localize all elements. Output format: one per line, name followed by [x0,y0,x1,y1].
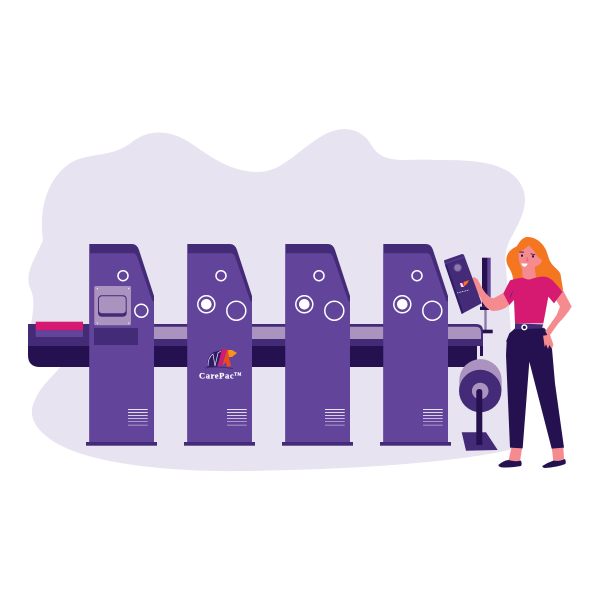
belt light band [154,327,481,339]
conveyor belt [28,324,483,367]
vent [325,409,345,426]
nose [526,257,529,262]
machine unit 1 [86,244,157,446]
upright stand [480,258,493,333]
panel rivets [97,288,129,324]
machine shell [383,244,448,442]
sheet top [36,322,83,330]
ring dial centre [201,299,212,310]
bear orange snout [228,350,237,357]
shoe right [542,459,566,468]
CarePac logo [199,349,242,380]
right dial [135,304,148,317]
machine shell [285,244,350,442]
bear ground line [205,367,233,368]
panel screen shadow [98,295,127,317]
sleeve crease [510,292,513,298]
bar highlight [488,258,491,307]
bear white contour lines [208,351,221,366]
shirt [503,277,563,323]
bear left body [207,350,222,367]
machine base [380,442,451,446]
machine body [89,253,154,442]
machine body [383,253,448,442]
right arm and hand [543,290,572,349]
neck [522,268,536,281]
ring dial [394,296,411,313]
roll back [459,359,502,391]
logo wordmark stripe [457,290,469,293]
pouch back [444,254,482,314]
logo wordmark: CarePac [199,370,234,380]
machine unit 2 [184,244,255,446]
shoe left [498,460,522,467]
machine body [285,253,350,442]
hair [506,237,563,291]
trousers [506,328,564,449]
bear pink stripe [218,349,227,366]
ring dial [296,296,313,313]
machine unit 4 [380,244,451,446]
panel plate [94,286,131,325]
small dial [314,271,324,281]
small dial [216,271,226,281]
pouch left gusset [445,265,464,314]
logo icon: bear stripes [205,349,237,368]
background blob [28,129,525,471]
foot [483,330,493,333]
belt dark lower section [28,346,477,367]
belt buckle [522,325,527,330]
vent [423,409,443,426]
machine shell [89,244,154,442]
large dial [227,301,246,320]
machine base [86,442,157,446]
eyes and brows [519,252,535,257]
stem [484,310,487,330]
machine base [282,442,353,446]
vent [128,409,148,426]
belt top stripe [28,324,483,346]
belt right stub [480,346,483,356]
vent [227,409,247,426]
panel screen [99,296,126,313]
printed pouch held by woman [444,254,482,314]
control panel [94,286,131,325]
roll hub [472,383,489,399]
stand foot [462,432,498,451]
machine shell [187,244,252,442]
pouch top seam [445,257,464,264]
ring dial centre [397,299,408,310]
trousers hip [506,328,547,342]
ankle left [508,447,522,461]
pink sheet on belt [36,322,83,337]
logo wordmark: TM [234,372,242,376]
legs and feet [498,328,566,468]
bear red stripe [222,350,231,367]
woman [473,237,572,468]
pouch logo [457,280,469,293]
paper roll on stand [459,359,502,451]
pouch window [454,264,462,272]
roll front [459,370,501,412]
ring dial [198,296,215,313]
ankle right [552,447,564,461]
logo orange [464,280,469,286]
logo white [460,283,464,287]
logo pink [462,281,466,287]
left arm and hand [473,277,510,311]
ring dial centre [299,299,310,310]
upper body [473,237,572,349]
belt [515,323,543,329]
face [519,245,542,271]
machine body [187,253,252,442]
machine unit 3 [282,244,353,446]
sheet stack [36,330,83,337]
smile [521,263,528,267]
dark plate [94,328,138,345]
large dial [325,301,344,320]
machine base [184,442,255,446]
small dial [118,271,128,281]
large dial [423,301,442,320]
small dial [412,271,422,281]
bar clamp [480,307,489,310]
dark bar [482,258,488,307]
roll post [476,389,482,445]
